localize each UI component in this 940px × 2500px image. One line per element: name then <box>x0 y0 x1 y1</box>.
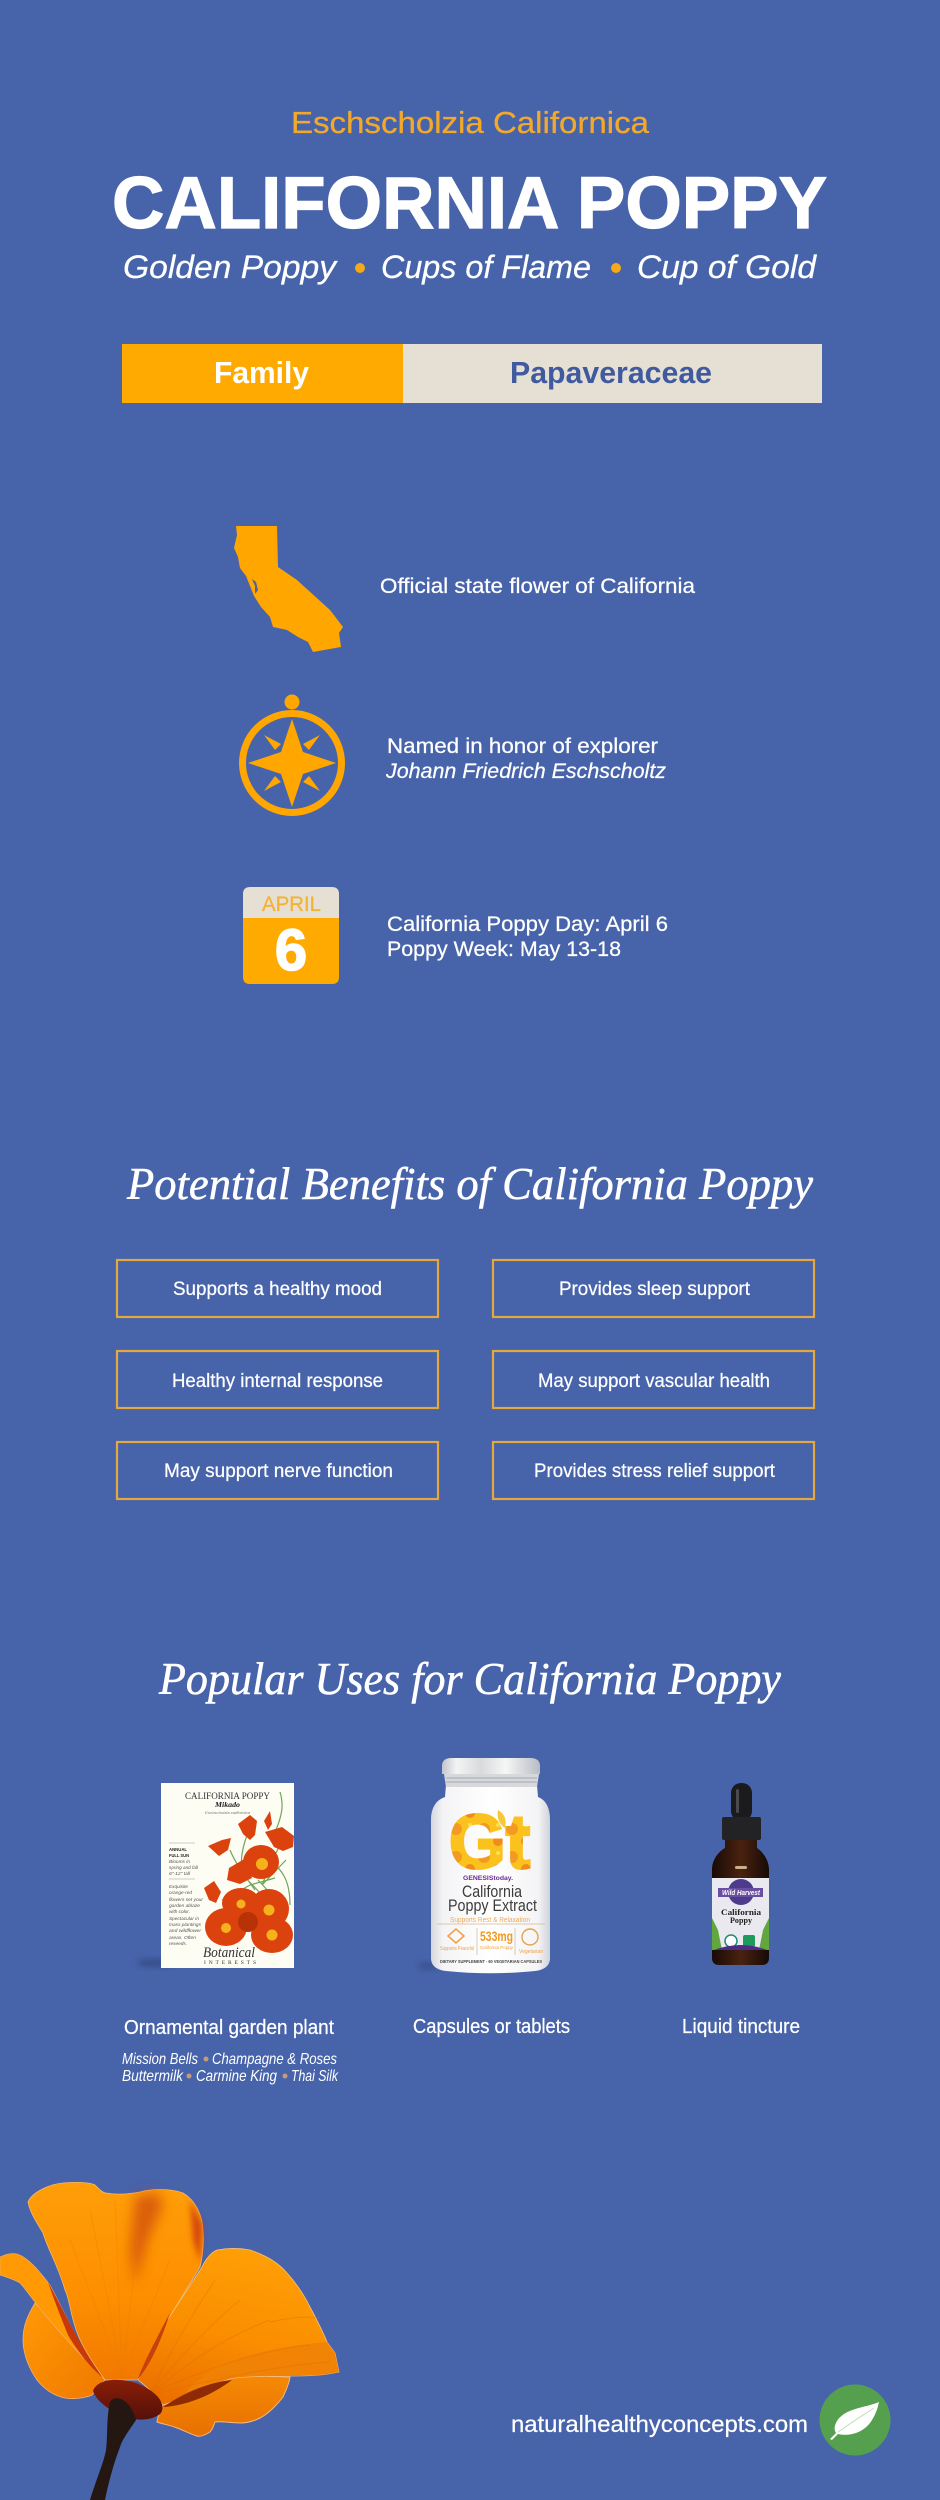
varieties list <box>122 2051 339 2085</box>
benefit: sleep <box>493 1260 814 1317</box>
family bar: Family <box>214 355 310 390</box>
heading: benefits: Potential Benefits of California Poppy <box>126 1158 814 1209</box>
lower left petal <box>23 2303 105 2399</box>
supplement bottle: California Poppy <box>480 1945 514 1950</box>
benefit: stress: Provides stress relief support <box>534 1460 776 1482</box>
benefit: vascular: May support vascular health <box>538 1370 770 1392</box>
seed packet: mass plantings <box>169 1922 202 1927</box>
supplement bottle: Supports Peaceful <box>440 1946 474 1952</box>
fact text: Official state flower of California <box>380 575 695 598</box>
dropper bottle: California <box>721 1908 761 1917</box>
seed packet <box>137 1783 294 1968</box>
common names: Golden Poppy <box>123 249 338 285</box>
use: capsules <box>413 1758 570 2038</box>
heading: popular uses: Popular Uses for California Poppy <box>158 1653 782 1704</box>
family bar <box>122 344 822 403</box>
seed packet: areas. Often <box>169 1935 197 1940</box>
center petal <box>28 2182 203 2380</box>
label: Liquid tincture <box>682 2016 800 2038</box>
supplement bottle: Vegetarian <box>519 1949 543 1955</box>
supplement bottle: DIETARY SUPPLEMENT · 60 VEGETARIAN CAPSULES <box>440 1959 542 1964</box>
benefit: mood: Supports a healthy mood <box>173 1278 382 1300</box>
icon: compass <box>242 694 342 812</box>
supplement bottle: GENESIStoday. <box>463 1875 513 1882</box>
seed packet: spring and fall <box>169 1865 199 1870</box>
supplement bottle: Gt <box>449 1800 530 1885</box>
right petal veins <box>150 2280 330 2395</box>
logo: leaf badge <box>820 2384 890 2456</box>
benefit: internal response <box>117 1351 438 1408</box>
header <box>112 105 827 285</box>
petal fold <box>185 2342 339 2393</box>
lower right petal <box>157 2376 290 2436</box>
varieties list: Carmine King <box>196 2068 277 2085</box>
use: tincture <box>682 1783 800 2038</box>
seed packet: reseeds. <box>169 1941 187 1946</box>
fact text: Johann Friedrich Eschscholtz <box>385 760 667 783</box>
fact: explorer <box>242 694 667 812</box>
seed packet: 6"-12" tall <box>169 1871 191 1876</box>
benefit: internal response: Healthy internal response <box>172 1370 383 1392</box>
red shading on center petal <box>130 2192 163 2285</box>
benefit: stress <box>493 1442 814 1499</box>
seed packet: and wildflower <box>169 1928 202 1933</box>
right edge shading <box>190 2200 203 2262</box>
fact text <box>387 913 668 961</box>
varieties list: Thai Silk <box>291 2068 339 2085</box>
latin name: Eschscholzia Californica <box>291 105 650 140</box>
seed packet: Blooms in <box>169 1859 191 1864</box>
seed packet: CALIFORNIA POPPY <box>185 1791 270 1801</box>
bay <box>252 579 258 594</box>
right petal <box>138 2248 339 2405</box>
seed packet: orange-red <box>169 1890 193 1895</box>
common names: Cup of Gold <box>637 249 817 285</box>
website: naturalhealthyconcepts.com <box>511 2411 808 2437</box>
benefit: nerve: May support nerve function <box>164 1460 393 1482</box>
use: garden plant <box>122 1783 339 2085</box>
poppy flower photo <box>0 2182 339 2500</box>
benefit: mood <box>117 1260 438 1317</box>
footer brand <box>511 2384 890 2456</box>
seed packet: garden ablaze <box>169 1903 201 1908</box>
stem <box>90 2398 136 2500</box>
supplement bottle: Poppy Extract <box>448 1896 537 1915</box>
seed packet: FULL SUN <box>169 1853 189 1858</box>
dropper bottle: Poppy <box>730 1916 752 1925</box>
seed packet: INTERESTS <box>204 1960 256 1966</box>
icon: calendar: APRIL <box>262 893 321 916</box>
fact text: Poppy Week: May 13-18 <box>387 938 621 961</box>
fact text: California Poppy Day: April 6 <box>387 913 668 936</box>
red divider <box>137 2313 170 2380</box>
fact: state flower <box>234 526 695 652</box>
seed packet: flowers set your <box>169 1897 204 1902</box>
calyx <box>93 2380 162 2420</box>
label: Ornamental garden plant <box>124 2017 334 2039</box>
icon: California map <box>234 526 343 652</box>
supplement bottle: Supports Rest & Relaxation <box>450 1917 530 1924</box>
fact text: Named in honor of explorer <box>387 735 658 758</box>
upper left petal <box>0 2254 105 2379</box>
varieties list: Mission Bells <box>122 2051 198 2068</box>
seed packet: Spectacular in <box>169 1916 200 1921</box>
dropper bottle <box>712 1783 769 1965</box>
benefit: sleep: Provides sleep support <box>559 1278 751 1300</box>
center petal veins <box>70 2200 170 2378</box>
icon: calendar <box>243 887 339 984</box>
seed packet: ANNUAL <box>169 1847 187 1852</box>
seed packet: with color. <box>169 1909 190 1914</box>
common names: Cups of Flame <box>381 249 591 285</box>
benefit: vascular <box>493 1351 814 1408</box>
seed packet: Exquisite <box>169 1884 189 1889</box>
panel: benefits grid <box>117 1260 814 1499</box>
dropper bottle: Wild Harvest <box>722 1890 761 1897</box>
label: Capsules or tablets <box>413 2016 570 2038</box>
fact text <box>385 735 667 783</box>
fact: poppy day <box>243 887 668 984</box>
title: CALIFORNIA POPPY <box>112 163 827 244</box>
varieties list: Buttermilk <box>122 2068 184 2085</box>
varieties list: Champagne & Roses <box>212 2051 337 2068</box>
seed packet: Eschscholzia californica <box>205 1810 251 1815</box>
benefit: nerve <box>117 1442 438 1499</box>
supplement bottle: 533mg <box>480 1928 513 1944</box>
icon: calendar: 6 <box>275 918 307 983</box>
common names <box>123 249 817 285</box>
seed packet: Botanical <box>203 1945 255 1961</box>
dark sliver under petal <box>163 2380 232 2407</box>
supplement bottle: California <box>462 1882 522 1901</box>
supplement bottle <box>418 1758 550 1973</box>
seed packet: Mikado <box>214 1800 240 1809</box>
red petal strip <box>48 2282 105 2379</box>
family bar: Papaveraceae <box>510 355 712 390</box>
